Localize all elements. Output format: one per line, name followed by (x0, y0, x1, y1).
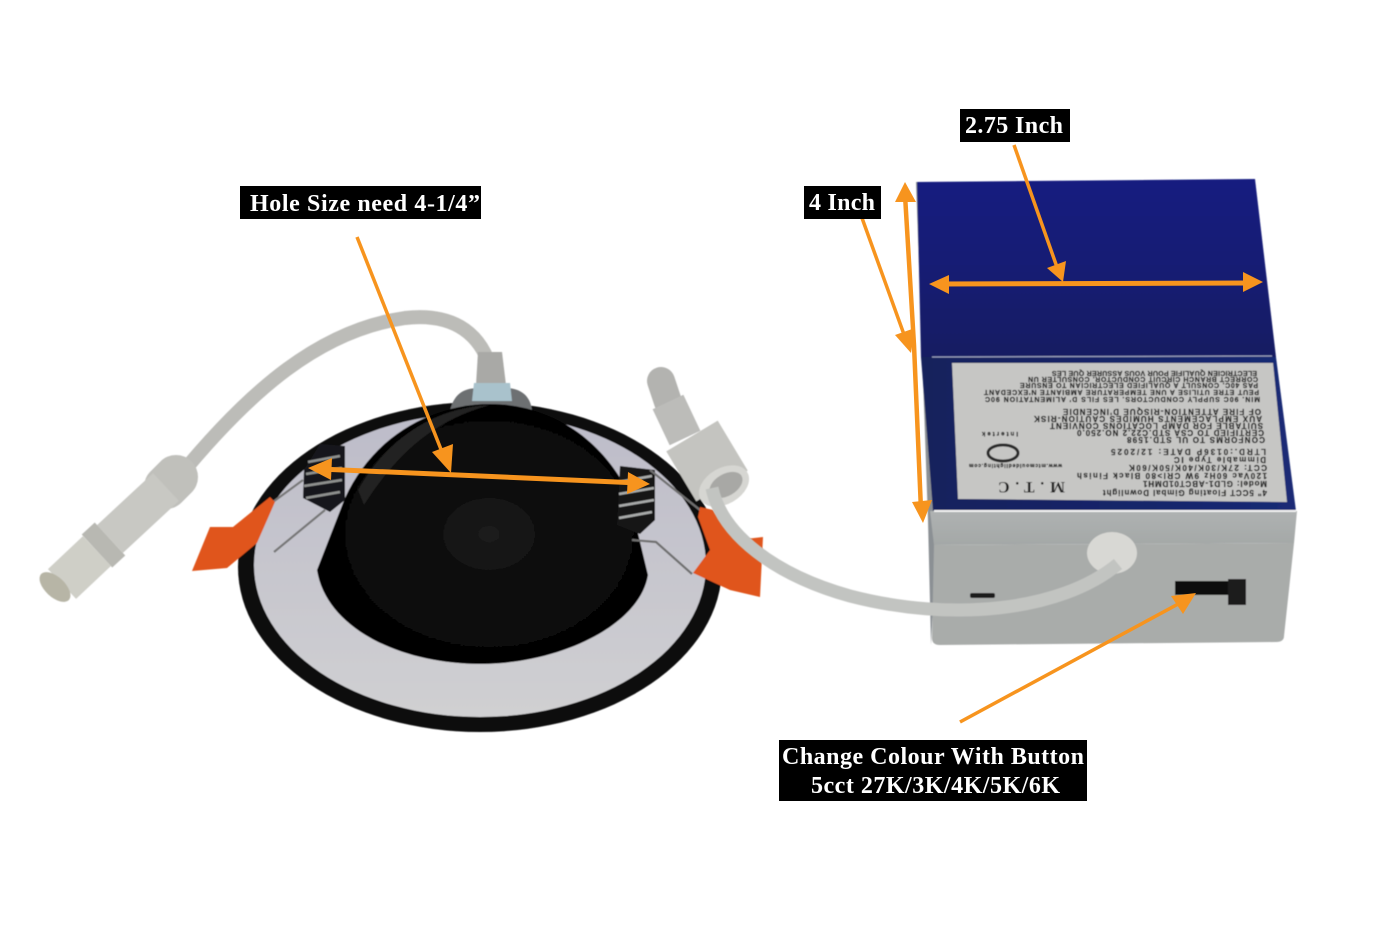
certification mark (988, 445, 1018, 461)
arrow: width leader (1014, 145, 1066, 282)
specification label: OF FIRE ATTENTION-RISQUE D'INCENDIE (1062, 407, 1261, 416)
arrow: hole width (308, 458, 650, 494)
strain relief and nut (450, 352, 532, 410)
grommet (1087, 532, 1137, 574)
specification label: 4" 5CCT Floating Gimbal Downlight (1103, 488, 1267, 497)
left cable (178, 317, 490, 478)
right connector (661, 381, 756, 515)
left spring (262, 444, 345, 552)
specification label: CERTIFIED TO CSA STD.C22.2 NO.250.0 (1076, 428, 1264, 437)
left connector (34, 477, 176, 607)
label: box length (804, 186, 881, 219)
dome upper edge (358, 405, 490, 505)
slot (970, 593, 995, 598)
driver cable (712, 488, 1118, 610)
website line: www.mtcmouldedlighting.com (968, 462, 1063, 468)
specification label: CONFORMS TO UL STD.1598 (1126, 435, 1265, 444)
box top panel (917, 179, 1276, 357)
arrow: box length (895, 182, 932, 523)
specification label: ELECTRICIEN QUALIFIE POUR VOUS ASSURER QUE LES (1052, 369, 1257, 376)
specification label: Model: GLD1-ABCT01DMH1 (1142, 479, 1267, 488)
specification label: MIN. 90C SUPPLY CONDUCTORS. LES FILS D' ALIMENTATION 90C (985, 395, 1260, 402)
band highlight (934, 510, 1296, 512)
specification label: LTRD.:0136P DATE: 12/2025 (1110, 447, 1266, 456)
specification label: SUITABLE FOR DAMP LOCATIONS CONVIENT (1050, 421, 1263, 430)
left orange clip (192, 497, 275, 571)
silver top band (930, 511, 1297, 545)
right orange clip (693, 507, 763, 597)
label: box length: 4 Inch (809, 190, 875, 216)
downlight assembly (34, 317, 763, 732)
arrow: box width (929, 272, 1263, 294)
box front panel (921, 357, 1296, 511)
specification label: AUX EMPLACEMENTS HUMIDES CAUTION-RISK (1034, 414, 1262, 423)
label: colour button: 5cct 27K/3K/4K/5K/6K (811, 773, 1060, 799)
specification label: PAS 40C. CONSULT A QUALIFIED ELECTRICIAN TO ENSURE (1020, 381, 1258, 388)
arrow: button leader (960, 593, 1196, 722)
right spring (617, 466, 700, 574)
arrow: length leader (862, 218, 915, 353)
label: colour button (779, 740, 1087, 801)
fold highlight (932, 356, 1272, 357)
label: box width: 2.75 Inch (965, 113, 1063, 139)
specification label: 120Vac 60Hz 9W CRI>80 Black Finish (1077, 471, 1267, 480)
mode switch (1175, 579, 1246, 605)
dome housing (317, 404, 648, 664)
box side edge (916, 182, 938, 645)
specification label: PEUT ETRE UTILISE A UNE TEMPERATURE AMBIANTE N'EXCEDANT (983, 388, 1259, 395)
ceiling disc outer rim (238, 402, 722, 732)
label: hole size: Hole Size need 4-1/4” (250, 191, 480, 217)
arrow: hole size leader (357, 237, 453, 473)
listing text: Intertek (981, 430, 1018, 436)
silver lower panel (932, 543, 1294, 645)
ceiling disc inner ring (254, 413, 706, 717)
specification label: CCT: 27K/30K/40K/50K/60K (1129, 463, 1267, 472)
specification label: Dimmable Type IC (1174, 455, 1266, 464)
brand mark: M.T.C (998, 478, 1065, 495)
specification label (952, 363, 1287, 502)
driver box (712, 179, 1297, 645)
label: colour button: Change Colour With Button (782, 744, 1084, 770)
specification label: CORRECT BRANCH CIRCUIT CONDUCTOR. CONSULTER UN (1028, 375, 1258, 382)
